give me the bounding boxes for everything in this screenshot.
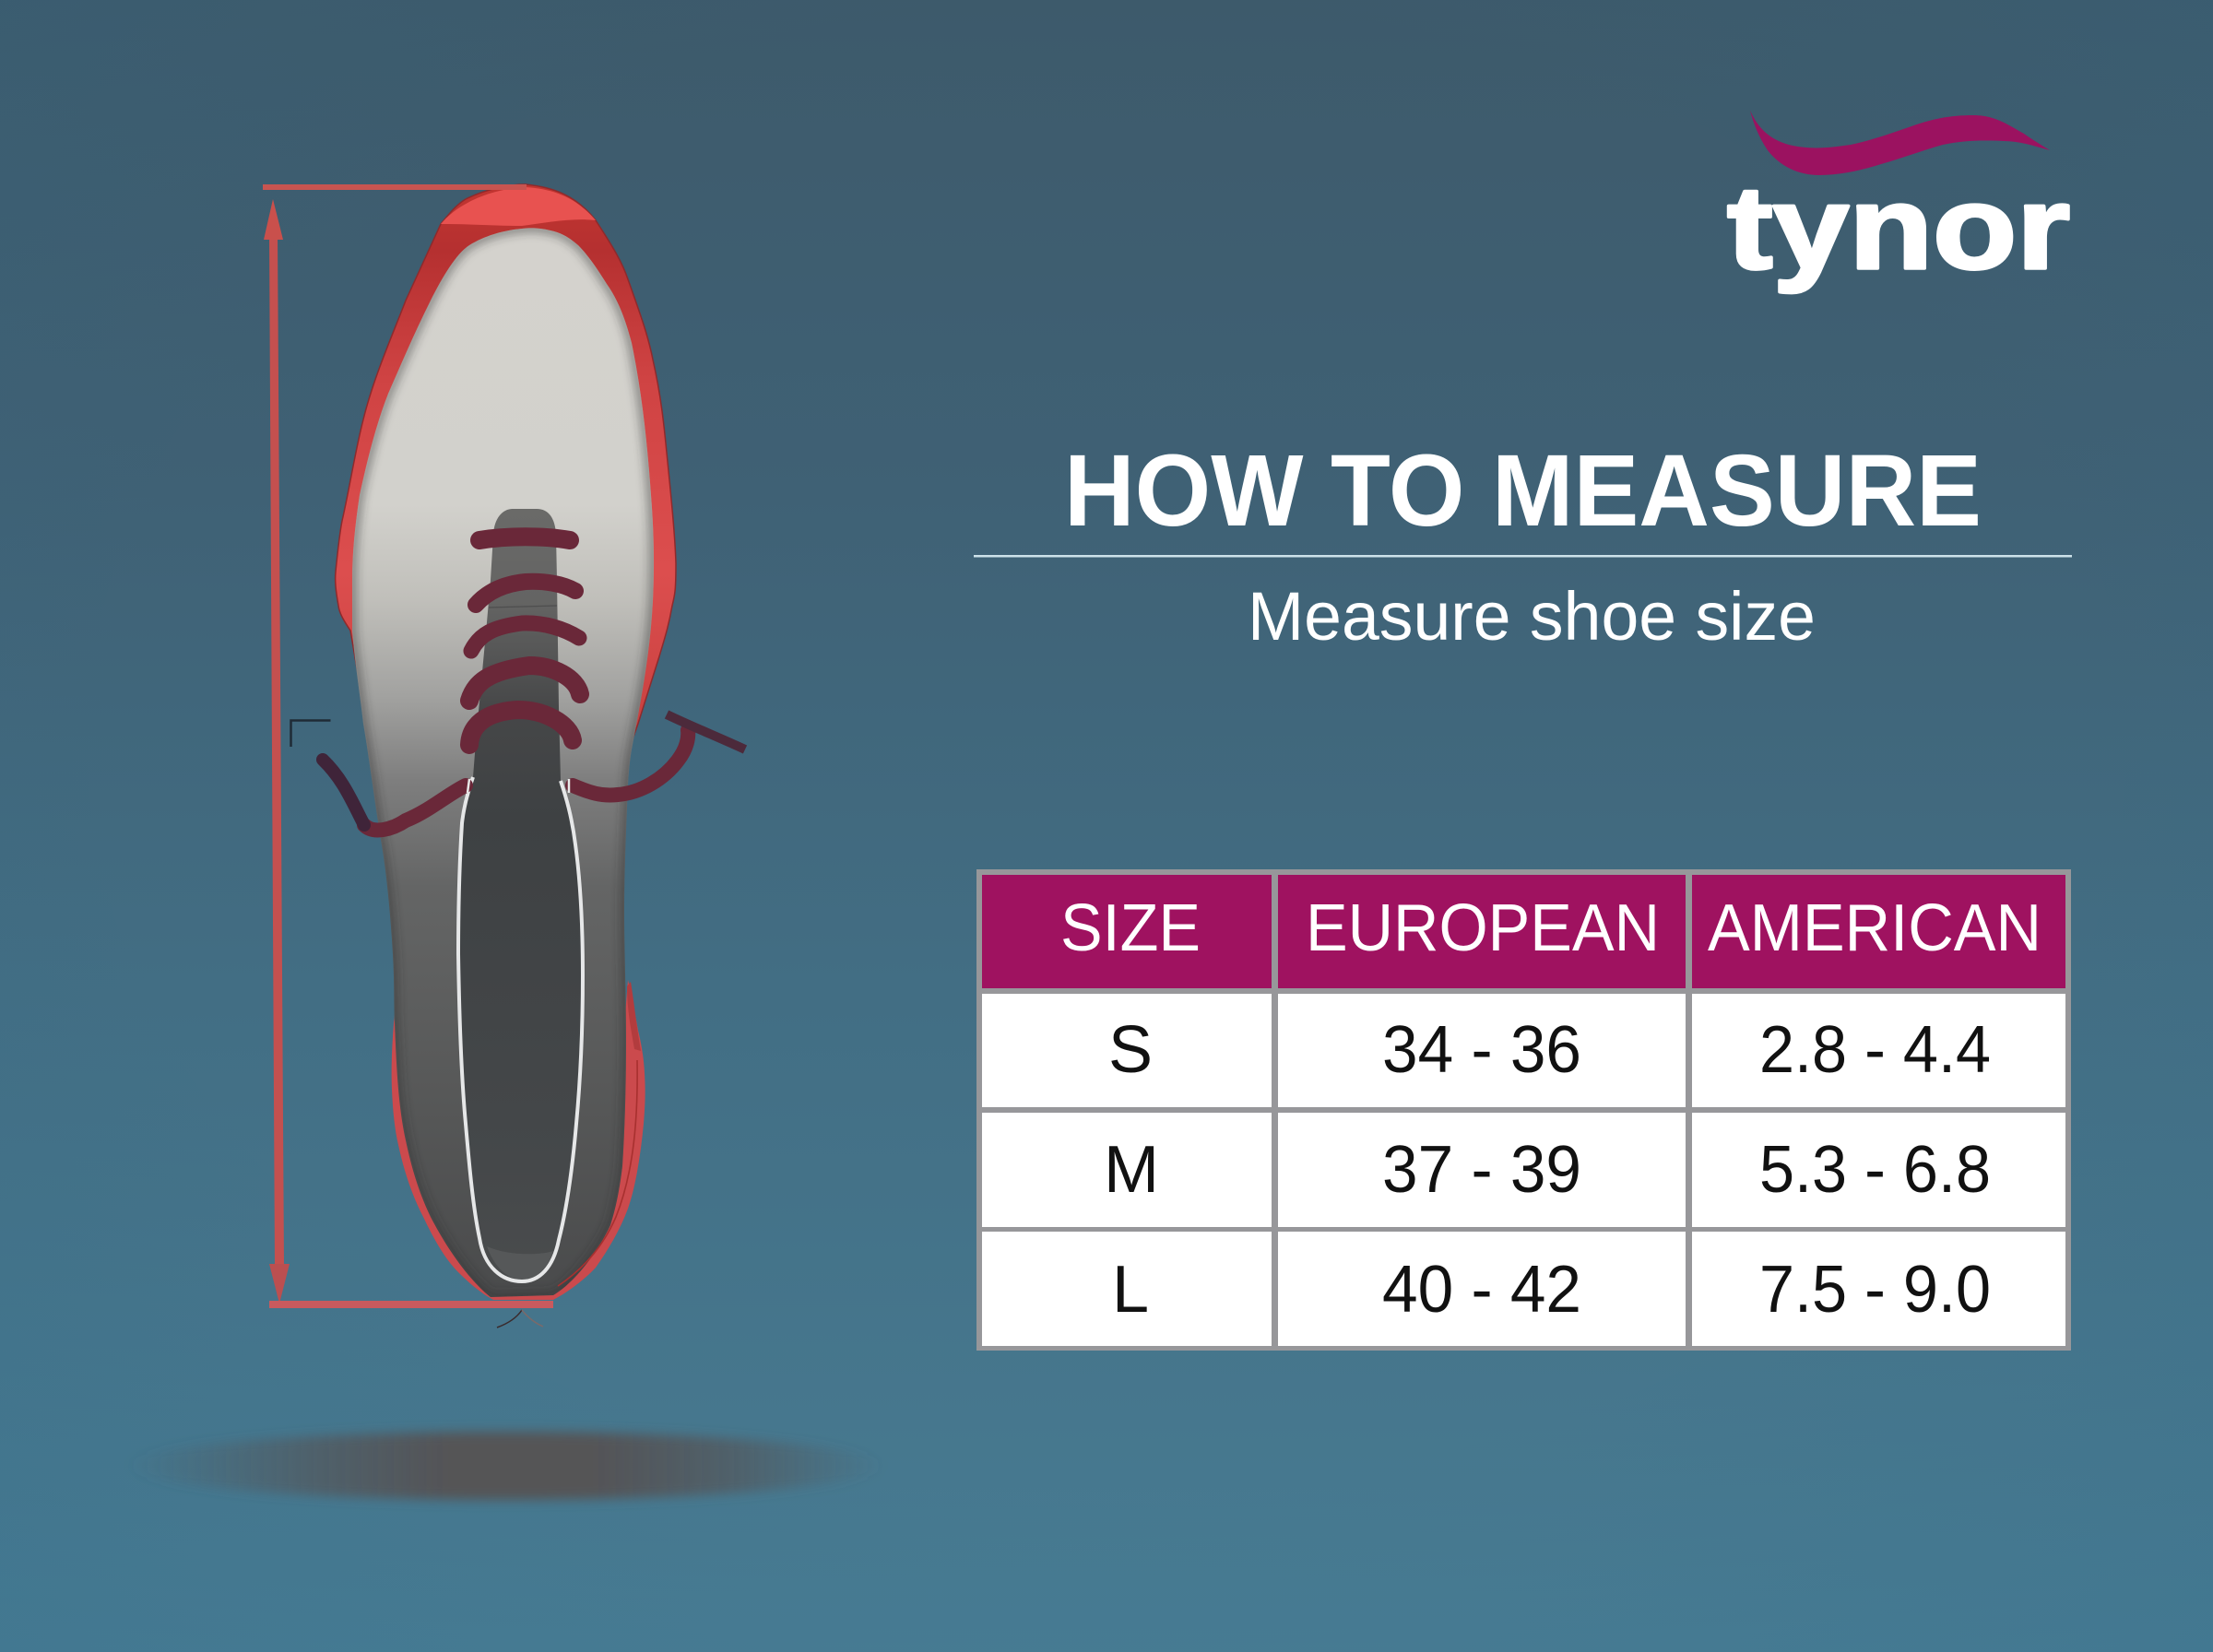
- size chart table: [976, 869, 2071, 1351]
- tag threads at heel: [497, 1310, 543, 1328]
- row S: 34 - 36: [1382, 1013, 1581, 1087]
- tongue seam: [489, 606, 557, 608]
- row M: [982, 1113, 2065, 1227]
- opening heel patch: [487, 1246, 553, 1280]
- tynor logo: [1727, 111, 2070, 294]
- row M: M: [1104, 1133, 1159, 1207]
- upper edge shading: [352, 228, 654, 1297]
- tongue and opening: [458, 509, 583, 1281]
- row L: 7.5 - 9.0: [1759, 1253, 1991, 1327]
- logo swoosh: [1750, 111, 2050, 175]
- table header row: AMERICAN: [1708, 891, 2041, 965]
- red sole lower part: [392, 980, 645, 1300]
- table frame: [976, 869, 2071, 1351]
- red sole stitching lines: [558, 982, 641, 1286]
- heading rule: [974, 555, 2072, 557]
- table header row: SIZE: [1060, 891, 1201, 965]
- row L: [982, 1232, 2065, 1346]
- row M: 5.3 - 6.8: [1759, 1133, 1991, 1207]
- row L: 40 - 42: [1382, 1253, 1581, 1327]
- floor shadow: [127, 1432, 883, 1500]
- red sole upper part: [336, 184, 676, 749]
- arrowhead down: [269, 1264, 290, 1304]
- length measurement arrow: [263, 184, 553, 1308]
- heading: HOW TO MEASURE: [1064, 434, 1982, 548]
- row L: L: [1112, 1253, 1149, 1327]
- arrowhead up: [264, 199, 283, 240]
- row S: S: [1108, 1013, 1153, 1087]
- white opening outline: [458, 777, 583, 1281]
- subheading: Measure shoe size: [1248, 578, 1816, 655]
- top measurement line: [263, 184, 527, 190]
- row M: 37 - 39: [1382, 1133, 1581, 1207]
- grey shoe upper: [352, 228, 654, 1297]
- vertical shaft: [269, 235, 284, 1268]
- table header row: EUROPEAN: [1306, 891, 1660, 965]
- shoe illustration: [323, 184, 745, 1328]
- red toe cap: [441, 187, 596, 226]
- L label mark: [291, 721, 330, 747]
- row S: 2.8 - 4.4: [1759, 1013, 1991, 1087]
- row S: [982, 994, 2065, 1107]
- logo wordmark: tynor: [1727, 162, 2070, 294]
- laces: [323, 537, 745, 830]
- white eyelet ticks: [467, 779, 569, 793]
- table header row: [982, 875, 2065, 988]
- bottom measurement line: [269, 1301, 553, 1308]
